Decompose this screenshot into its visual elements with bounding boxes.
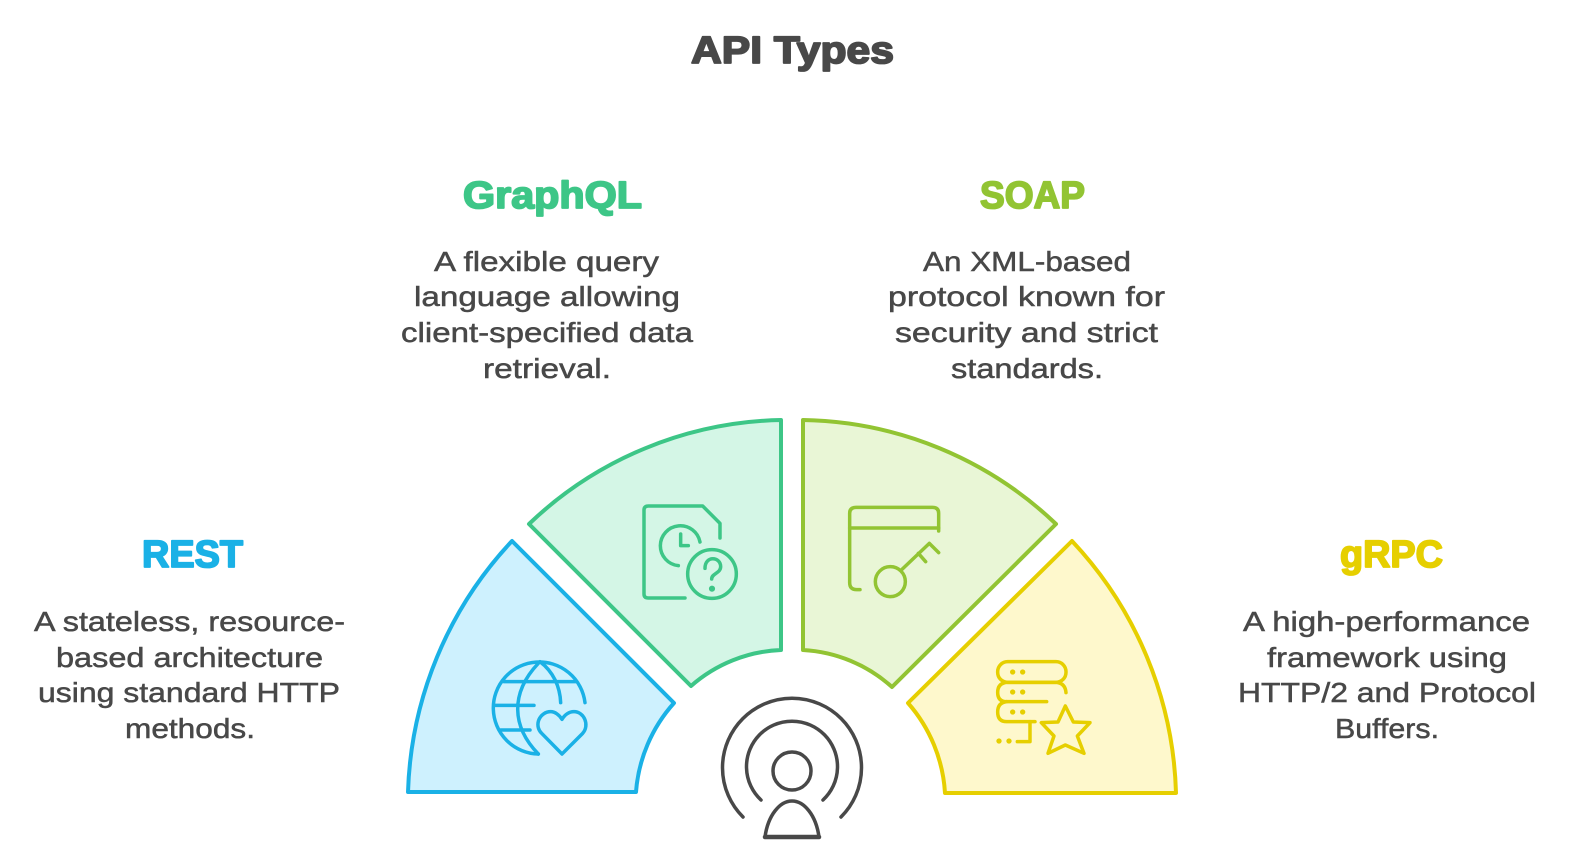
panel: GraphQL text	[401, 175, 693, 384]
text block: SOAP description: An XML-based	[923, 246, 1131, 277]
text block: GraphQL description	[401, 246, 693, 384]
text block: SOAP description: standards.	[951, 353, 1103, 384]
heading: GraphQL: GraphQL	[463, 175, 642, 217]
heading: REST: REST	[142, 534, 243, 576]
icon: window with key	[850, 507, 939, 597]
segment: GraphQL	[529, 420, 781, 686]
text block: GraphQL description: A flexible query	[434, 246, 659, 277]
text block: gRPC description	[1238, 606, 1536, 744]
text block: SOAP description	[888, 246, 1165, 384]
segment: REST	[408, 541, 674, 792]
heading: SOAP: SOAP	[980, 175, 1085, 217]
title: API Types	[691, 30, 894, 72]
heading: gRPC: gRPC	[1340, 534, 1443, 576]
text block: gRPC description: framework using	[1267, 642, 1507, 673]
text block: gRPC description: Buffers.	[1335, 713, 1439, 744]
text block: GraphQL description: language allowing	[414, 281, 680, 312]
text block: gRPC description: A high-performance	[1243, 606, 1530, 637]
text block: REST description	[34, 606, 345, 744]
panel: REST text	[34, 534, 345, 744]
text block: GraphQL description: client-specified data	[401, 317, 693, 348]
text block: REST description: A stateless, resource-	[34, 606, 345, 637]
text block: REST description: based architecture	[56, 642, 323, 673]
icon: globe with heart	[493, 662, 586, 754]
segment: SOAP	[803, 420, 1056, 687]
panel: gRPC text	[1238, 534, 1536, 744]
text block: REST description: using standard HTTP	[38, 677, 340, 708]
icon: server stack with star	[997, 662, 1090, 753]
segment: gRPC	[908, 541, 1176, 793]
text block: REST description: methods.	[125, 713, 255, 744]
text block: SOAP description: protocol known for	[888, 281, 1165, 312]
icon: document with clock and question mark	[644, 506, 736, 598]
text block: SOAP description: security and strict	[895, 317, 1158, 348]
panel: SOAP text	[888, 175, 1165, 384]
text block: GraphQL description: retrieval.	[483, 353, 611, 384]
icon: central person with signal arcs	[722, 698, 862, 837]
text block: gRPC description: HTTP/2 and Protocol	[1238, 677, 1536, 708]
